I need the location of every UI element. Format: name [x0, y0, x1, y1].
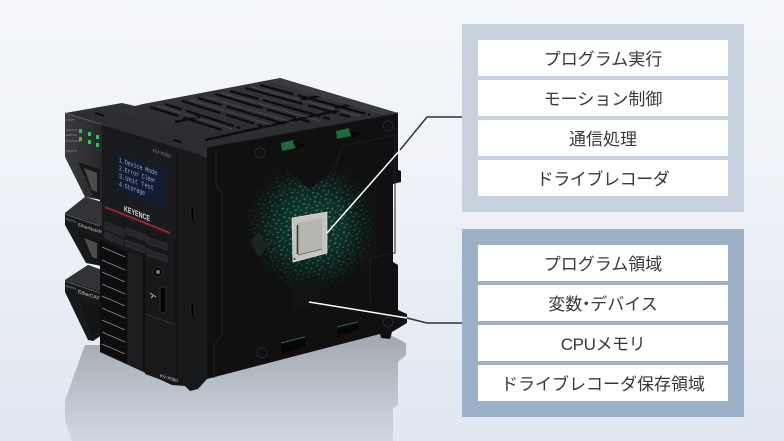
- display screen: [103, 128, 176, 240]
- module 1 with LEDs and port: SD/RTC: [66, 149, 78, 153]
- red accent line: [105, 206, 170, 234]
- row: CPU memory: [478, 325, 728, 361]
- vent slats: [100, 240, 127, 363]
- module 2: EtherNet/IP: PORT2: [66, 217, 76, 224]
- display screen: 1.Device Mode: [119, 157, 157, 178]
- center and door panels: KV-X550: [160, 373, 178, 383]
- center and door panels: [128, 252, 178, 385]
- row: CPU memory: CPUメモリ: [561, 335, 645, 354]
- product illustration: controller unit with callout lines: [64, 78, 462, 441]
- module 1 with LEDs and port: STORAGE: [66, 139, 81, 143]
- row: program execution: プログラム実行: [544, 50, 662, 69]
- connector: green tabs: [281, 128, 360, 354]
- row: drive recorder: [478, 160, 728, 196]
- module 1 with LEDs and port: ERROR: [66, 133, 78, 137]
- CPU chip: [292, 212, 327, 262]
- module 1 with LEDs and port: STATUS: [66, 128, 77, 132]
- row: drive recorder storage: ドライブレコーダ保存領域: [501, 375, 705, 394]
- row: variables and devices: 変数・デバイス: [548, 295, 658, 314]
- floor reflection: [65, 325, 406, 441]
- display screen: KV-X550: [153, 148, 171, 159]
- row: communication: 通信処理: [569, 130, 637, 149]
- mode dial and USB port: [150, 207, 194, 318]
- callout line: lower, memory to bottom panel: [309, 302, 462, 323]
- row: program area: [478, 245, 728, 281]
- module 1 with LEDs and port: PORT: [66, 118, 74, 122]
- module 2: EtherNet/IP: [65, 197, 102, 266]
- device front face: [65, 114, 207, 391]
- row: drive recorder: ドライブレコーダ: [537, 170, 669, 189]
- front buttons: [105, 222, 167, 262]
- module 1 with LEDs and port: [65, 114, 102, 200]
- row: motion control: [478, 80, 728, 116]
- row: communication: [478, 120, 728, 156]
- callout line: upper, CPU to top panel: [327, 117, 462, 233]
- row: program area: プログラム領域: [544, 255, 662, 274]
- module 3: EtherCAT: PORT3: [66, 284, 76, 291]
- row: motion control: モーション制御: [544, 90, 662, 109]
- module 3: EtherCAT: [65, 265, 102, 341]
- KEYENCE logo: KEYENCE: [124, 203, 150, 223]
- device side panel: [207, 113, 407, 379]
- circuit board view: [248, 166, 376, 288]
- row: program execution: [478, 40, 728, 76]
- display screen: 2.Error Clear: [119, 165, 156, 186]
- panel: CPU memory: [462, 229, 744, 417]
- row: drive recorder storage: [478, 365, 728, 401]
- display screen: 3.Unit Test: [119, 173, 154, 193]
- module 3: EtherCAT: EtherCAT: [78, 289, 100, 302]
- row: variables and devices: [478, 285, 728, 321]
- module 2: EtherNet/IP: EtherNet/IP: [78, 222, 102, 236]
- display screen: 4.Storage: [119, 181, 145, 198]
- panel: CPU functions: [462, 24, 744, 212]
- device top face with vents: [65, 78, 398, 158]
